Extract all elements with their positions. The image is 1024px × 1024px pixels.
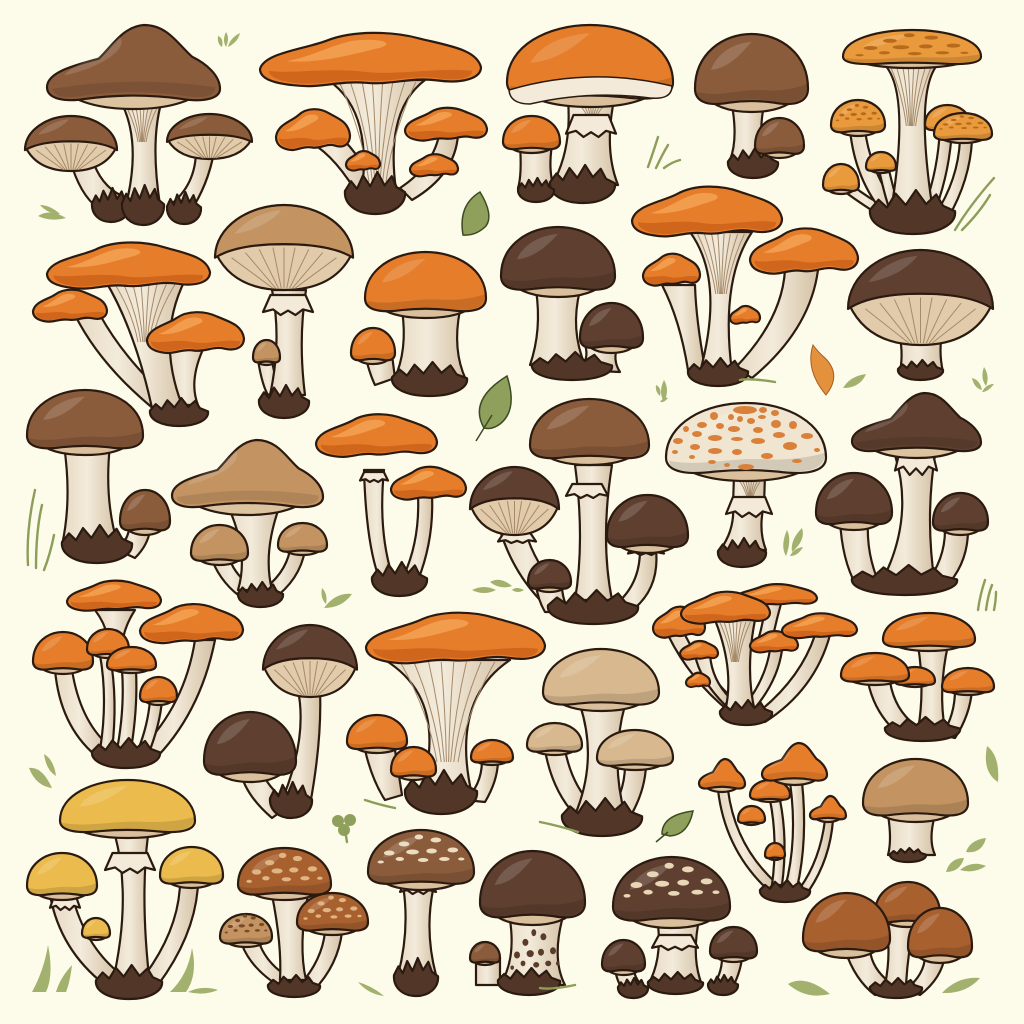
cap: speckled brown xyxy=(238,848,331,900)
leaf: large green centre xyxy=(476,376,511,441)
cap: dark brown xyxy=(501,227,615,297)
cluster: plain tan mushroom xyxy=(863,759,968,862)
cluster: orange bolete xyxy=(351,252,486,396)
cap: brown pale-flecked xyxy=(368,830,474,890)
cluster: speckled toadstool xyxy=(666,403,826,567)
grass tufts xyxy=(28,137,996,989)
cluster: orange sextet left xyxy=(33,581,243,768)
cap: brown conical xyxy=(263,625,357,697)
cluster: brown pair xyxy=(204,625,357,818)
cap: brown dome xyxy=(27,390,143,455)
cluster: tan parasol xyxy=(215,205,353,418)
cap: orange dome xyxy=(507,25,673,107)
cluster: brown spotted stem xyxy=(470,851,585,995)
cap: yellow xyxy=(60,780,195,838)
cluster: brown with companion xyxy=(27,390,170,563)
cluster: orange mushroom with small companion xyxy=(503,25,673,203)
cap: orange bun xyxy=(365,252,486,318)
cluster: orange bouquet xyxy=(653,584,857,725)
cap: brown with gills xyxy=(848,250,993,345)
cluster: brown trio right xyxy=(816,393,988,595)
cap: orange flat xyxy=(316,414,437,457)
cap: dark brown flat xyxy=(852,393,981,458)
cap: wavy orange xyxy=(47,242,210,289)
cluster: slim orange bouquet xyxy=(699,743,846,902)
cluster: orange small group right xyxy=(841,613,994,741)
cap: golden spotted xyxy=(843,30,981,68)
cap: dark speckled xyxy=(613,857,730,928)
leaf: orange xyxy=(811,345,834,395)
cap: tan mottled xyxy=(863,759,968,822)
cap: orange xyxy=(883,613,975,651)
cluster: golden spotted mushrooms xyxy=(823,30,992,234)
cap: large brown xyxy=(47,25,220,109)
cap: orange conical xyxy=(762,743,827,785)
cap: orange wavy xyxy=(140,604,243,643)
cap rim: pale lip xyxy=(509,77,672,104)
cap: large orange xyxy=(260,33,481,86)
cluster: tan trio xyxy=(172,440,327,607)
cap: tan parasol xyxy=(215,205,353,290)
cluster: slim orange pair xyxy=(316,414,466,596)
cluster: orange trio centre right xyxy=(632,187,858,386)
cluster: brown mushrooms top left xyxy=(25,25,252,225)
cap: tan flat xyxy=(172,440,323,515)
cluster: speckled dark trio xyxy=(602,857,757,998)
cap: brown xyxy=(530,399,649,465)
cluster: yellow mushrooms xyxy=(27,780,223,999)
cap: large orange wavy xyxy=(366,613,545,663)
cluster: rust trio xyxy=(803,882,972,998)
leaf: green top centre xyxy=(462,192,489,235)
cluster: brown bun mushroom xyxy=(695,34,808,178)
cluster: beige trio xyxy=(527,649,673,836)
cap: dark rounded xyxy=(480,851,585,925)
cluster: speckled brown trio xyxy=(220,848,368,997)
leaf: green lower centre xyxy=(656,811,693,842)
cluster: orange trio left xyxy=(33,242,244,426)
cap: rust dome xyxy=(803,893,890,958)
cap: wavy orange xyxy=(632,187,782,236)
cluster: dark brown bolete xyxy=(501,227,643,380)
cap: speckled xyxy=(666,403,826,481)
cluster: brown ringed xyxy=(368,830,474,996)
cluster: brown quartet xyxy=(470,399,688,624)
cluster: brown gilled mushroom xyxy=(848,250,993,380)
cluster: orange mushrooms top xyxy=(260,33,487,214)
icon: clover xyxy=(332,814,356,842)
cap: beige dome xyxy=(543,649,659,711)
cap: brown bun xyxy=(695,34,808,112)
cluster: large orange chanterelle xyxy=(347,613,545,814)
cap: orange wavy xyxy=(681,592,770,624)
